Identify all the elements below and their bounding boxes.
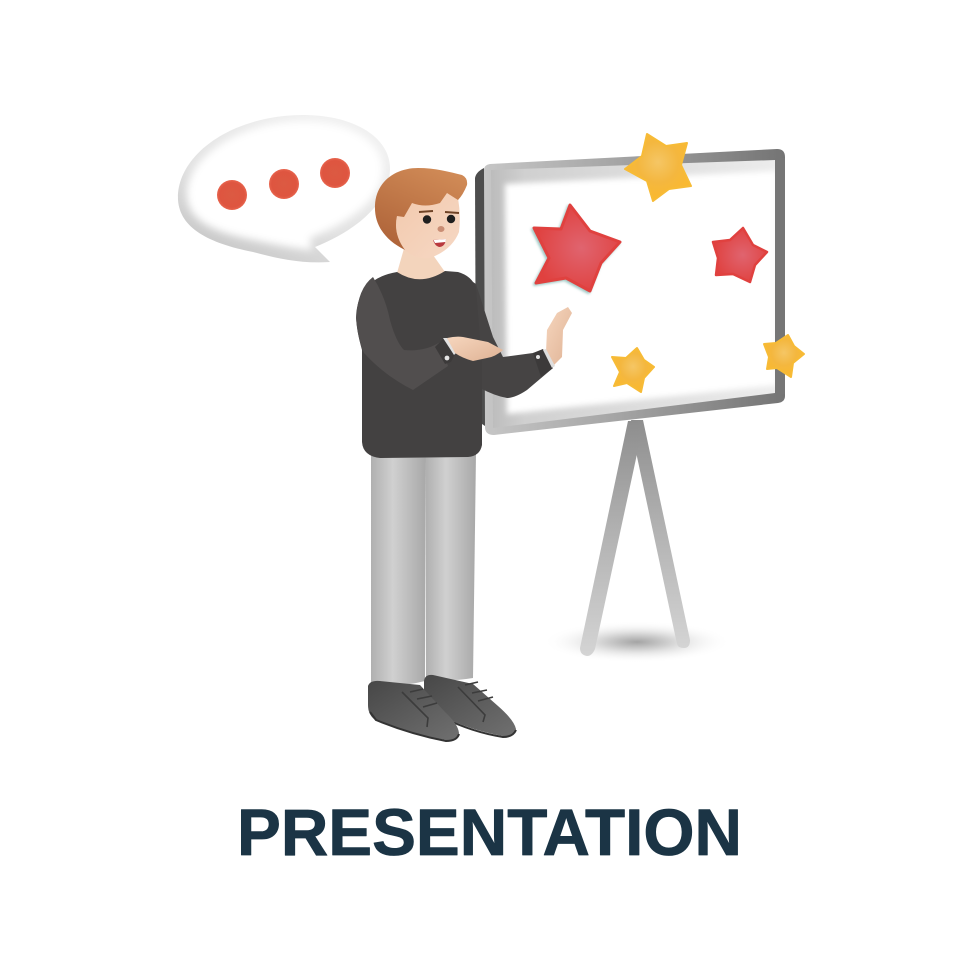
- title: PRESENTATION: [237, 795, 742, 869]
- star: right yellow: [764, 335, 804, 377]
- nose: [438, 226, 444, 232]
- sweater: [356, 271, 482, 458]
- easel legs: [580, 420, 690, 656]
- near cuff: [435, 338, 457, 364]
- star: top yellow: [625, 134, 691, 201]
- shoes: [368, 675, 516, 741]
- presenter: [356, 168, 572, 741]
- hair: [375, 168, 467, 250]
- whiteboard: [475, 149, 785, 435]
- star: center yellow: [612, 348, 654, 392]
- far cuff: [533, 349, 555, 377]
- near hand: [447, 337, 503, 361]
- speech bubble: [178, 115, 390, 262]
- eyebrows: [419, 211, 459, 213]
- face: [396, 190, 460, 258]
- trousers: [371, 452, 476, 685]
- star: small red: [713, 228, 767, 282]
- far arm: [470, 280, 553, 398]
- neck: [397, 245, 445, 280]
- speech dot left: [217, 180, 247, 210]
- mouth: [433, 239, 446, 247]
- speech dot right: [320, 158, 350, 188]
- near arm: [356, 277, 448, 390]
- star: large red: [532, 205, 620, 292]
- speech dot middle: [269, 169, 299, 199]
- eyes: [423, 215, 455, 224]
- far hand: [546, 307, 572, 366]
- easel floor shadow: [543, 621, 731, 663]
